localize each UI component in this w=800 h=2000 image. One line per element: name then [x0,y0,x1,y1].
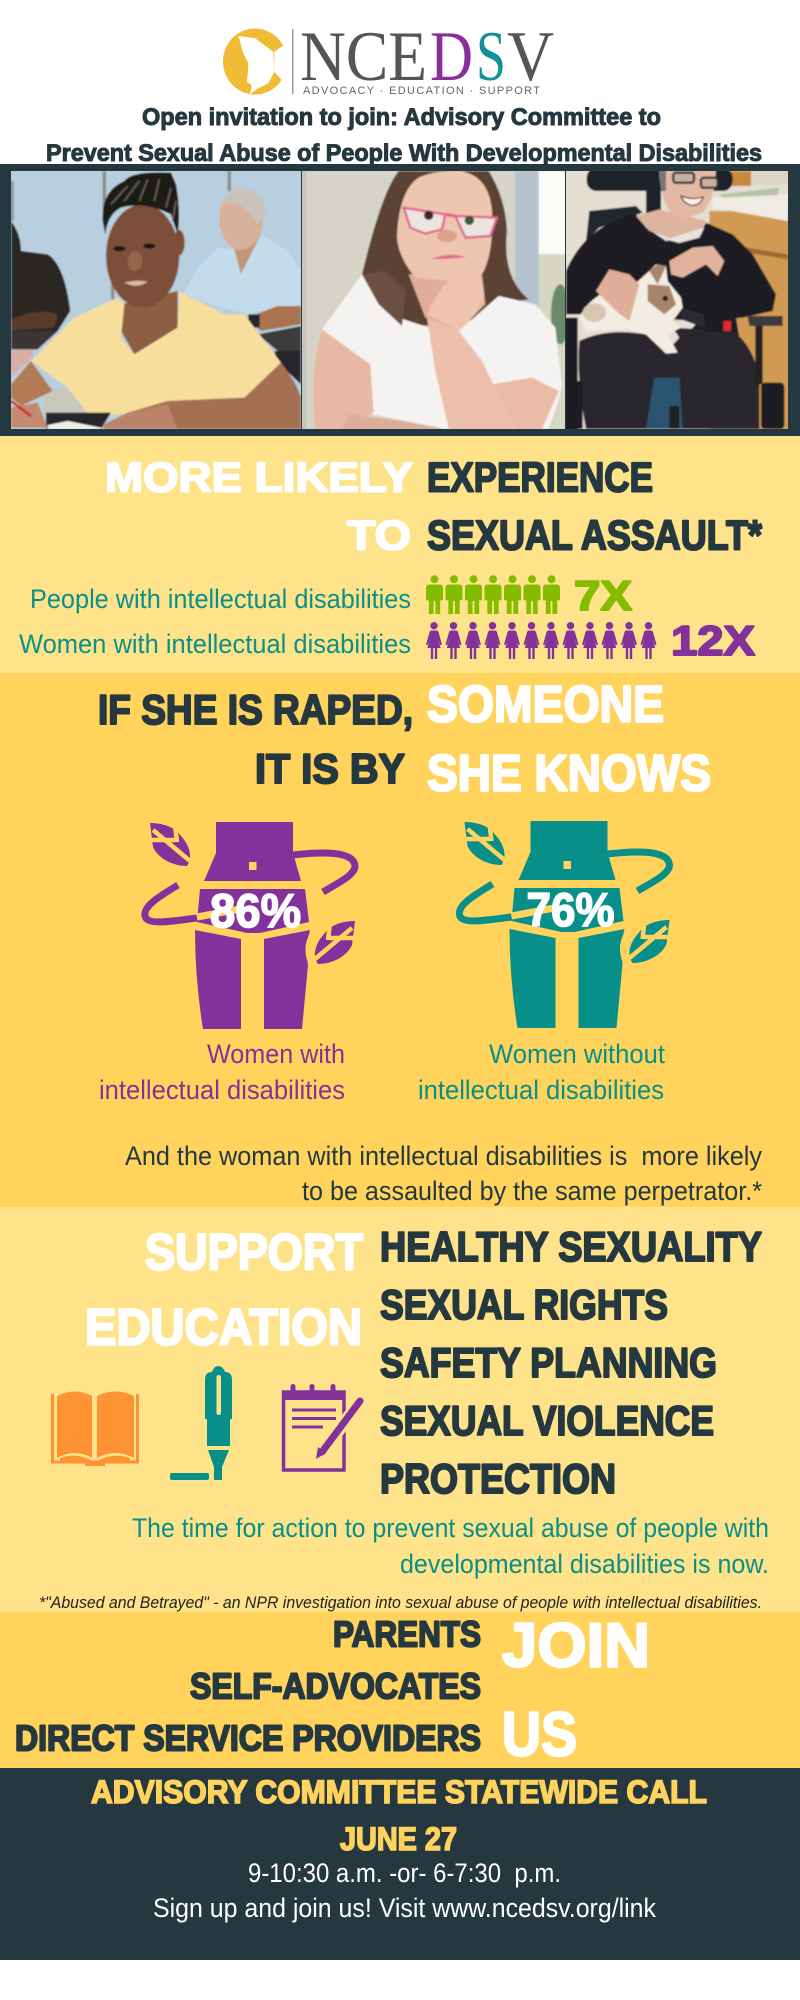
panel: join us [0,1612,800,1770]
photo: woman with pink glasses [299,168,570,432]
list: education topics: SEXUAL VIOLENCE [380,1397,714,1444]
logo: NCEDSV: ADVOCACY · EDUCATION · SUPPORT [303,85,540,97]
chart icon: 86 percent figure [145,822,355,1029]
heading: support education [85,1224,363,1356]
panel: statewide call [0,1768,800,1960]
list: education topics: SAFETY PLANNING [380,1339,717,1386]
label: women with intellectual disabilities [99,1039,345,1105]
footnote: *"Abused and Betrayed" - an NPR investigation into sexual abuse of people with intellectual disabilities. [39,1593,762,1612]
list: audiences: SELF-ADVOCATES [190,1666,481,1706]
title [46,104,762,167]
date: JUNE 27 [340,1821,457,1857]
chart icon: 86 percent figure: 86% [210,884,301,937]
label: women with intellectual disabilities: Women with [207,1039,345,1069]
photo: woman in yellow shirt with man behind [8,168,304,432]
icon row: 7 people [426,575,560,614]
label: women without intellectual disabilities: Women without [489,1039,665,1069]
panel: if she is raped [0,673,800,1207]
list: audiences: PARENTS [333,1614,481,1654]
icon: open book [52,1392,138,1466]
chart icon: 76 percent figure: 76% [526,883,614,936]
heading: someone she knows [427,676,711,802]
panel: support education [0,1207,800,1612]
text: time for action: developmental disabilities is now. [400,1549,769,1579]
logo: NCEDSV [223,18,554,97]
icon: notepad and pencil [282,1384,360,1470]
heading: join us: US [502,1700,577,1770]
logo: NCEDSV: NCE [300,18,427,96]
text: same perpetrator statement: And the woman with intellectual disabilities is more likely [125,1141,762,1171]
chart icon: 76 percent figure [459,821,670,1028]
heading: advisory committee statewide call: ADVISORY COMMITTEE STATEWIDE CALL [91,1774,707,1810]
text: same perpetrator statement [125,1141,762,1206]
heading: someone she knows: SHE KNOWS [427,744,711,802]
list: audiences: DIRECT SERVICE PROVIDERS [15,1718,481,1758]
label: women without intellectual disabilities [418,1039,665,1105]
logo: NCEDSV: V [507,18,554,96]
list: education topics: PROTECTION [380,1455,616,1502]
icon row: 12 women [426,622,656,659]
photo: smiling woman in wheelchair with rabbit [563,168,793,432]
text: sign up link: Sign up and join us! Visit www.ncedsv.org/link [153,1893,656,1923]
panel: more likely to experience sexual assault [0,436,800,673]
heading: join us [502,1612,650,1770]
heading: more likely to: MORE LIKELY [105,454,413,500]
title: Open invitation to join: Advisory Committee to [142,104,661,131]
text: same perpetrator statement: to be assaulted by the same perpetrator.* [302,1176,762,1206]
logo: NCEDSV: S [476,18,506,96]
label: women without intellectual disabilities: intellectual disabilities [418,1075,664,1105]
icon: pen [170,1366,232,1480]
heading: if she is raped it is by: IT IS BY [255,745,405,792]
heading: someone she knows: SOMEONE [427,676,664,732]
label: people with intellectual disabilities: People with intellectual disabilities [30,584,411,614]
stat: 7X: 7X [574,572,632,619]
heading: more likely to [105,454,413,558]
heading: if she is raped it is by [98,686,413,792]
logo: NCEDSV: D [430,18,473,96]
label: women with intellectual disabilities: Women with intellectual disabilities [19,629,411,659]
panel: photo band [0,164,800,436]
heading: support education: EDUCATION [85,1298,362,1356]
heading: support education: SUPPORT [145,1224,363,1280]
heading: experience sexual assault [427,454,763,558]
list: audiences [15,1614,481,1758]
text: call times: 9-10:30 a.m. -or- 6-7:30 p.m. [248,1858,561,1888]
heading: more likely to: TO [347,512,411,558]
heading: if she is raped it is by: IF SHE IS RAPED, [98,686,413,733]
label: women with intellectual disabilities: intellectual disabilities [99,1075,345,1105]
stat: 12X: 12X [671,617,755,664]
heading: join us: JOIN [502,1612,650,1680]
list: education topics: SEXUAL RIGHTS [380,1281,668,1328]
list: education topics [380,1223,762,1502]
heading: experience sexual assault: EXPERIENCE [427,454,653,500]
text: time for action [132,1513,769,1579]
title: Prevent Sexual Abuse of People With Developmental Disabilities [46,140,762,167]
